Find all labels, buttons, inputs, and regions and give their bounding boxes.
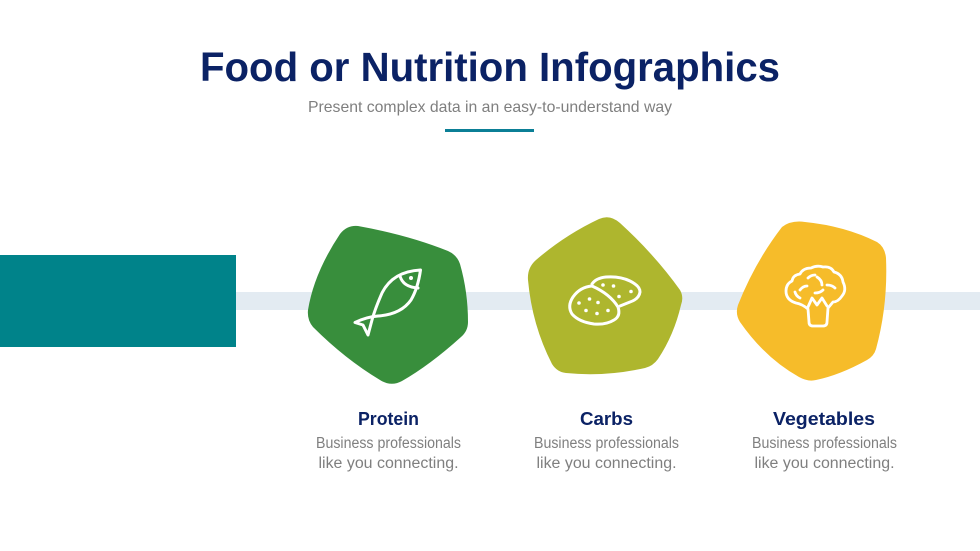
text: Protein description: Business professionals: [316, 435, 461, 452]
yellow blob: [737, 222, 886, 381]
timeline band: [236, 292, 980, 310]
icon: fish: [355, 270, 420, 335]
subtitle: Present complex data in an easy-to-understand way: [308, 99, 672, 116]
olive blob: [528, 217, 682, 374]
text: Carbs description: Business professionals: [534, 435, 679, 452]
panel: vegetables: [737, 222, 897, 472]
text: Vegetables description: like you connecting.: [754, 455, 894, 472]
panel: protein: [308, 226, 468, 472]
heading: Protein: Protein: [358, 408, 419, 429]
teal block: [0, 255, 236, 347]
title underline: [445, 129, 534, 132]
text: Vegetables description: Business professionals: [752, 435, 897, 452]
text: Carbs description: like you connecting.: [536, 455, 676, 472]
heading: Carbs: Carbs: [580, 408, 633, 429]
text: Protein description: like you connecting.: [318, 455, 458, 472]
icon: potatoes: [570, 277, 640, 324]
heading: Vegetables: Vegetables: [773, 408, 875, 429]
panel: carbs: [528, 217, 682, 472]
green blob: [308, 226, 468, 384]
title: Food or Nutrition Infographics: [200, 44, 780, 90]
icon: broccoli: [786, 266, 845, 326]
